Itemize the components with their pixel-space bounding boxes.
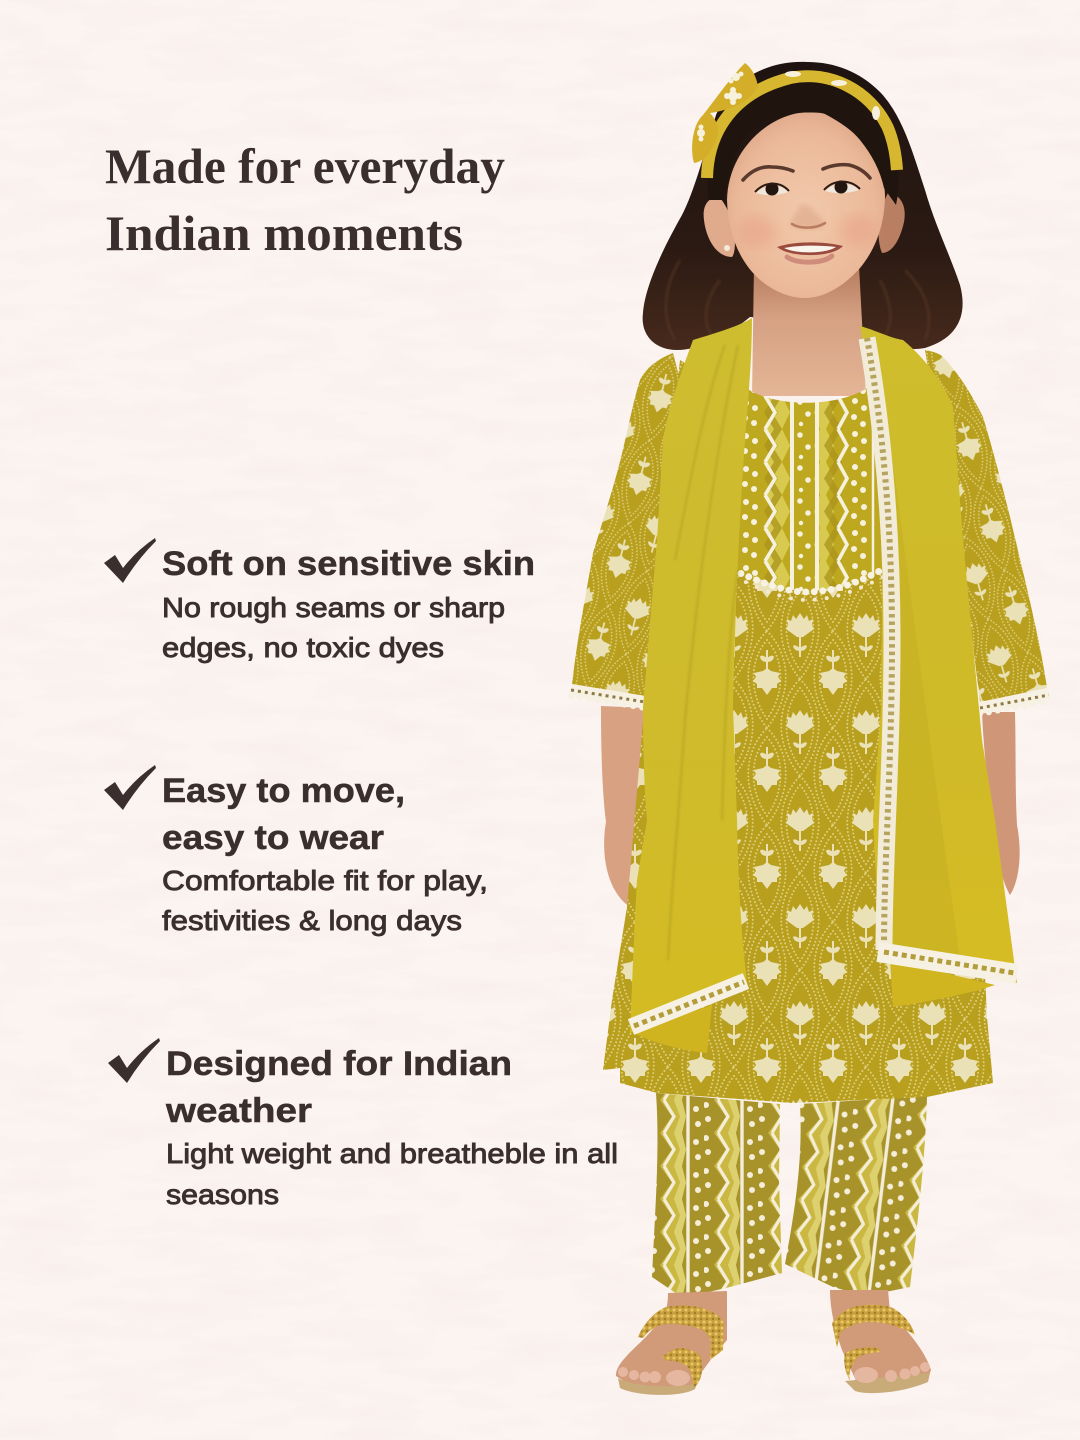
- heading: easy to move, easy to wear: Easy to move,: [162, 772, 405, 810]
- nose: [791, 205, 825, 229]
- scarf left panel: [630, 318, 752, 1033]
- title: [105, 138, 505, 261]
- pant leg right: [785, 1096, 927, 1296]
- scarf lace hem left: [631, 981, 746, 1027]
- right cuff lace: [980, 695, 1049, 714]
- heading: easy to move, easy to wear: [162, 772, 405, 857]
- body text: seams and dyes: [162, 592, 505, 663]
- scarf right panel: [860, 326, 1017, 983]
- eyebrows: [743, 165, 870, 180]
- hair back: [643, 62, 963, 350]
- right sleeve: [925, 350, 1047, 702]
- body text: seams and dyes: edges, no toxic dyes: [162, 632, 444, 663]
- heading: designed for Indian weather: weather: [165, 1092, 312, 1130]
- icon: check mark: [104, 538, 156, 583]
- feature: soft on sensitive skin: [104, 538, 535, 663]
- title: Made for everyday: [105, 138, 505, 194]
- kurta sleeves: [571, 350, 1049, 714]
- body text: seams and dyes: No rough seams or sharp: [162, 592, 505, 623]
- facial features: [743, 165, 870, 262]
- flowers on bow and band: [697, 71, 880, 142]
- heading: designed for Indian weather: [165, 1045, 512, 1130]
- scarf lower flaps: [632, 960, 995, 1053]
- hair highlights: [666, 260, 929, 340]
- eyes: [755, 180, 860, 196]
- bow: [692, 63, 880, 163]
- illustration: girl in mustard kurta set: [571, 62, 1049, 1395]
- body text: comfortable fit: festivities & long days: [162, 905, 462, 936]
- scarf lace hem right: [878, 952, 1017, 974]
- body text: comfortable fit: Comfortable fit for play,: [162, 865, 488, 896]
- ears: [704, 193, 905, 257]
- heading: designed for Indian weather: Designed for Indian: [166, 1045, 512, 1083]
- mouth: [777, 242, 843, 262]
- headband: [707, 76, 897, 178]
- title: Indian moments: [105, 205, 463, 261]
- pant leg left: [652, 1093, 782, 1298]
- body text: light weight: [166, 1138, 618, 1210]
- icon: check mark: [104, 765, 156, 810]
- right foot: [830, 1290, 931, 1393]
- yoke lace: [733, 568, 885, 600]
- hair front: [707, 76, 899, 205]
- heading: easy to move, easy to wear: easy to wear: [162, 819, 384, 857]
- scarf right inner fold: [890, 440, 960, 960]
- cheeks: [737, 214, 877, 248]
- scarf left folds: [668, 345, 738, 960]
- body text: comfortable fit: [162, 865, 488, 936]
- arms: [601, 706, 1020, 907]
- body text: light weight: seasons: [166, 1179, 279, 1210]
- feet and sandals: [616, 1290, 931, 1395]
- yoke panel: [735, 386, 884, 592]
- scarf lace borders: [631, 338, 1017, 1027]
- left foot: [616, 1291, 727, 1395]
- icon: check mark: [108, 1038, 160, 1083]
- scarf lace vertical right: [867, 338, 892, 950]
- kurta body: [603, 360, 993, 1103]
- feature: designed for Indian weather: [108, 1038, 618, 1210]
- left sleeve: [572, 353, 680, 696]
- face: [727, 112, 885, 298]
- left cuff lace: [571, 690, 645, 708]
- heading: soft on sensitive skin: Soft on sensitive skin: [162, 545, 535, 583]
- neck and chest: [752, 266, 866, 396]
- pants: [652, 1093, 927, 1298]
- feature: easy to move: [104, 765, 488, 936]
- body text: light weight: Light weight and breatheble in all: [166, 1138, 618, 1169]
- left arm and hand: [601, 706, 648, 907]
- right arm and hand: [982, 712, 1020, 895]
